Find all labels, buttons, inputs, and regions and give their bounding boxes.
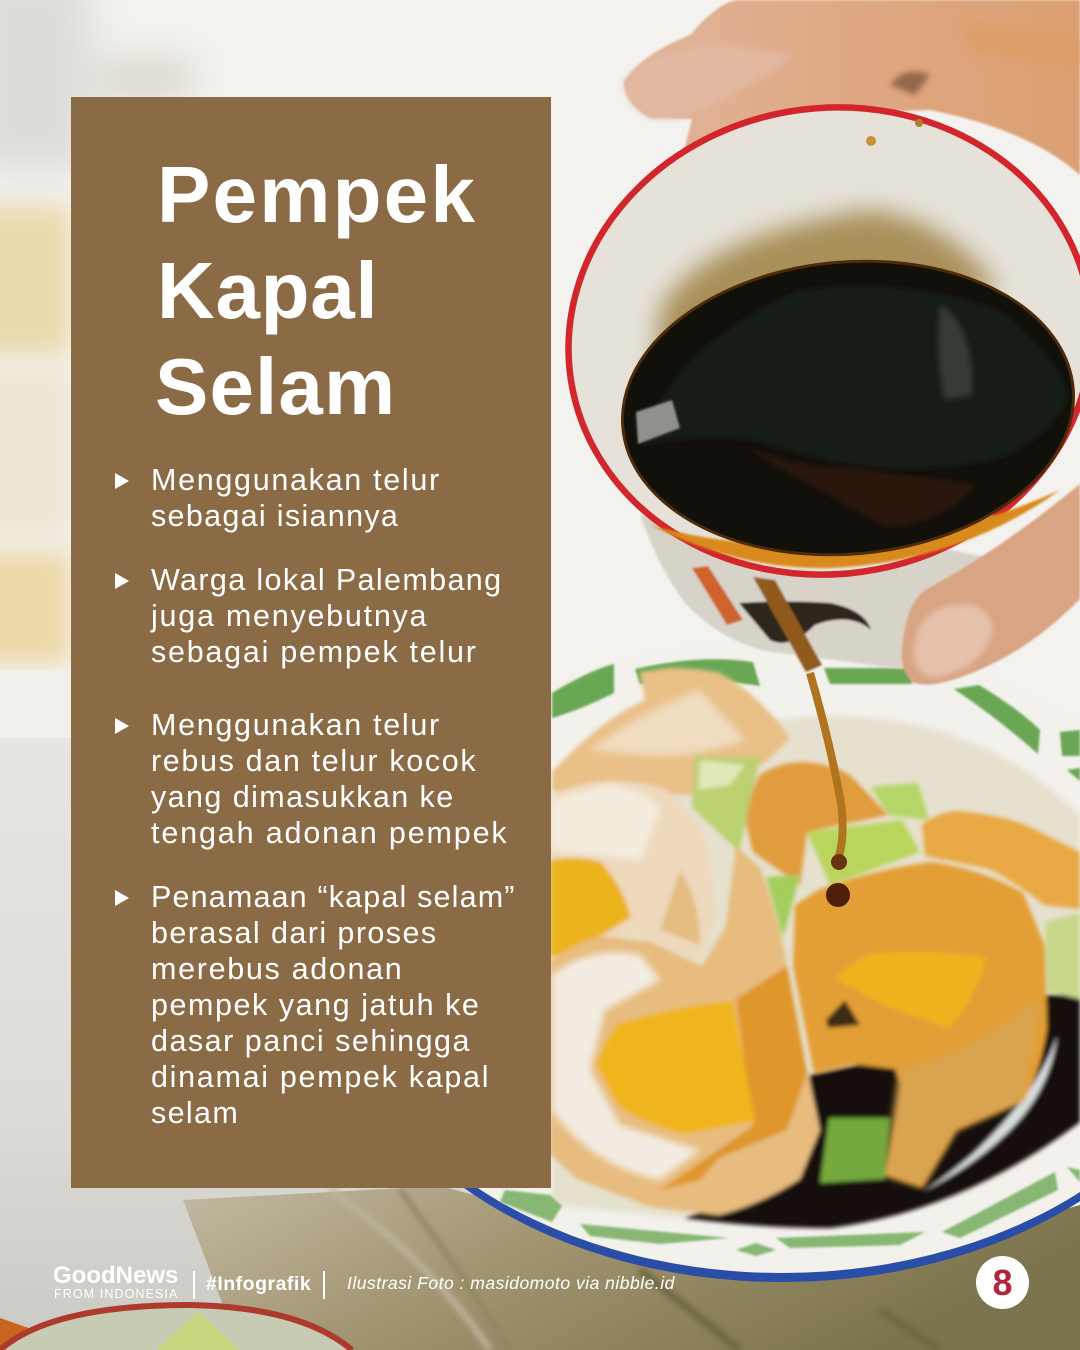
footer divider left bbox=[193, 1271, 195, 1299]
cloth bbox=[183, 1186, 1080, 1350]
thumb bbox=[902, 484, 1080, 685]
page number badge bbox=[976, 1256, 1029, 1309]
bullet 4 bbox=[151, 880, 516, 1130]
bullet marker 3 bbox=[115, 718, 129, 734]
bottom cucumber bbox=[820, 1118, 890, 1183]
bullet 4: Penamaan “kapal selam” bbox=[151, 880, 516, 914]
bullet 1 bbox=[151, 463, 441, 533]
bullet 3: yang dimasukkan ke bbox=[151, 780, 455, 814]
bullet 2: sebagai pempek telur bbox=[151, 635, 478, 669]
sauce in cup bbox=[610, 243, 1080, 573]
back right pempek bbox=[922, 811, 1080, 909]
page number badge: 8 bbox=[992, 1262, 1013, 1303]
bullet marker 4 bbox=[115, 890, 129, 906]
footer logo: GoodNews from Indonesia: GoodNews bbox=[53, 1262, 178, 1289]
bullet 4: dinamai pempek kapal bbox=[151, 1060, 490, 1094]
title: Selam bbox=[155, 342, 396, 431]
sauce pool bbox=[685, 995, 1080, 1228]
footer logo: GoodNews from Indonesia bbox=[53, 1262, 178, 1301]
plate bbox=[332, 637, 1080, 1282]
bullet 1: sebagai isiannya bbox=[151, 499, 399, 533]
bullet 1: Menggunakan telur bbox=[151, 463, 441, 497]
bullet 4: pempek yang jatuh ke bbox=[151, 988, 480, 1022]
bullet marker 1 bbox=[115, 473, 129, 489]
right large pempek bbox=[793, 862, 1047, 1187]
front left pempek bbox=[550, 846, 820, 1215]
footer hashtag: #Infografik bbox=[206, 1273, 311, 1295]
back left pempek bbox=[552, 668, 790, 795]
sauce drip bbox=[810, 673, 850, 907]
bullet 4: selam bbox=[151, 1096, 239, 1130]
small bowl bottom left bbox=[0, 1305, 352, 1350]
bullet 2: Warga lokal Palembang bbox=[151, 563, 502, 597]
hand fingers bbox=[624, 0, 1080, 175]
panel: brown text box bbox=[71, 97, 551, 1188]
title: Kapal bbox=[157, 246, 378, 335]
bullet 3: Menggunakan telur bbox=[151, 708, 441, 742]
bullet 4: berasal dari proses bbox=[151, 916, 438, 950]
footer divider right bbox=[323, 1271, 325, 1299]
footer logo: GoodNews from Indonesia: FROM INDONESIA bbox=[54, 1287, 178, 1301]
bullet 4: merebus adonan bbox=[151, 952, 403, 986]
bullet marker 2 bbox=[115, 573, 129, 589]
bullet 2: juga menyebutnya bbox=[151, 599, 428, 633]
title: Pempek bbox=[157, 150, 477, 239]
cup exterior bbox=[640, 515, 1000, 672]
bullet 2 bbox=[150, 563, 502, 669]
cucumber cubes bbox=[692, 756, 760, 852]
bullet 3: rebus dan telur kocok bbox=[151, 744, 477, 778]
cup interior bbox=[538, 74, 1080, 608]
bullet 4: dasar panci sehingga bbox=[151, 1024, 471, 1058]
left middle pempek bbox=[550, 781, 716, 962]
title bbox=[155, 150, 477, 431]
bullet 3 bbox=[151, 708, 509, 850]
back center pempek bbox=[746, 762, 888, 885]
food bbox=[550, 668, 1080, 1228]
bullet 3: tengah adonan pempek bbox=[151, 816, 509, 850]
photo credit: Ilustrasi Foto : masidomoto via nibble.id bbox=[347, 1273, 675, 1293]
